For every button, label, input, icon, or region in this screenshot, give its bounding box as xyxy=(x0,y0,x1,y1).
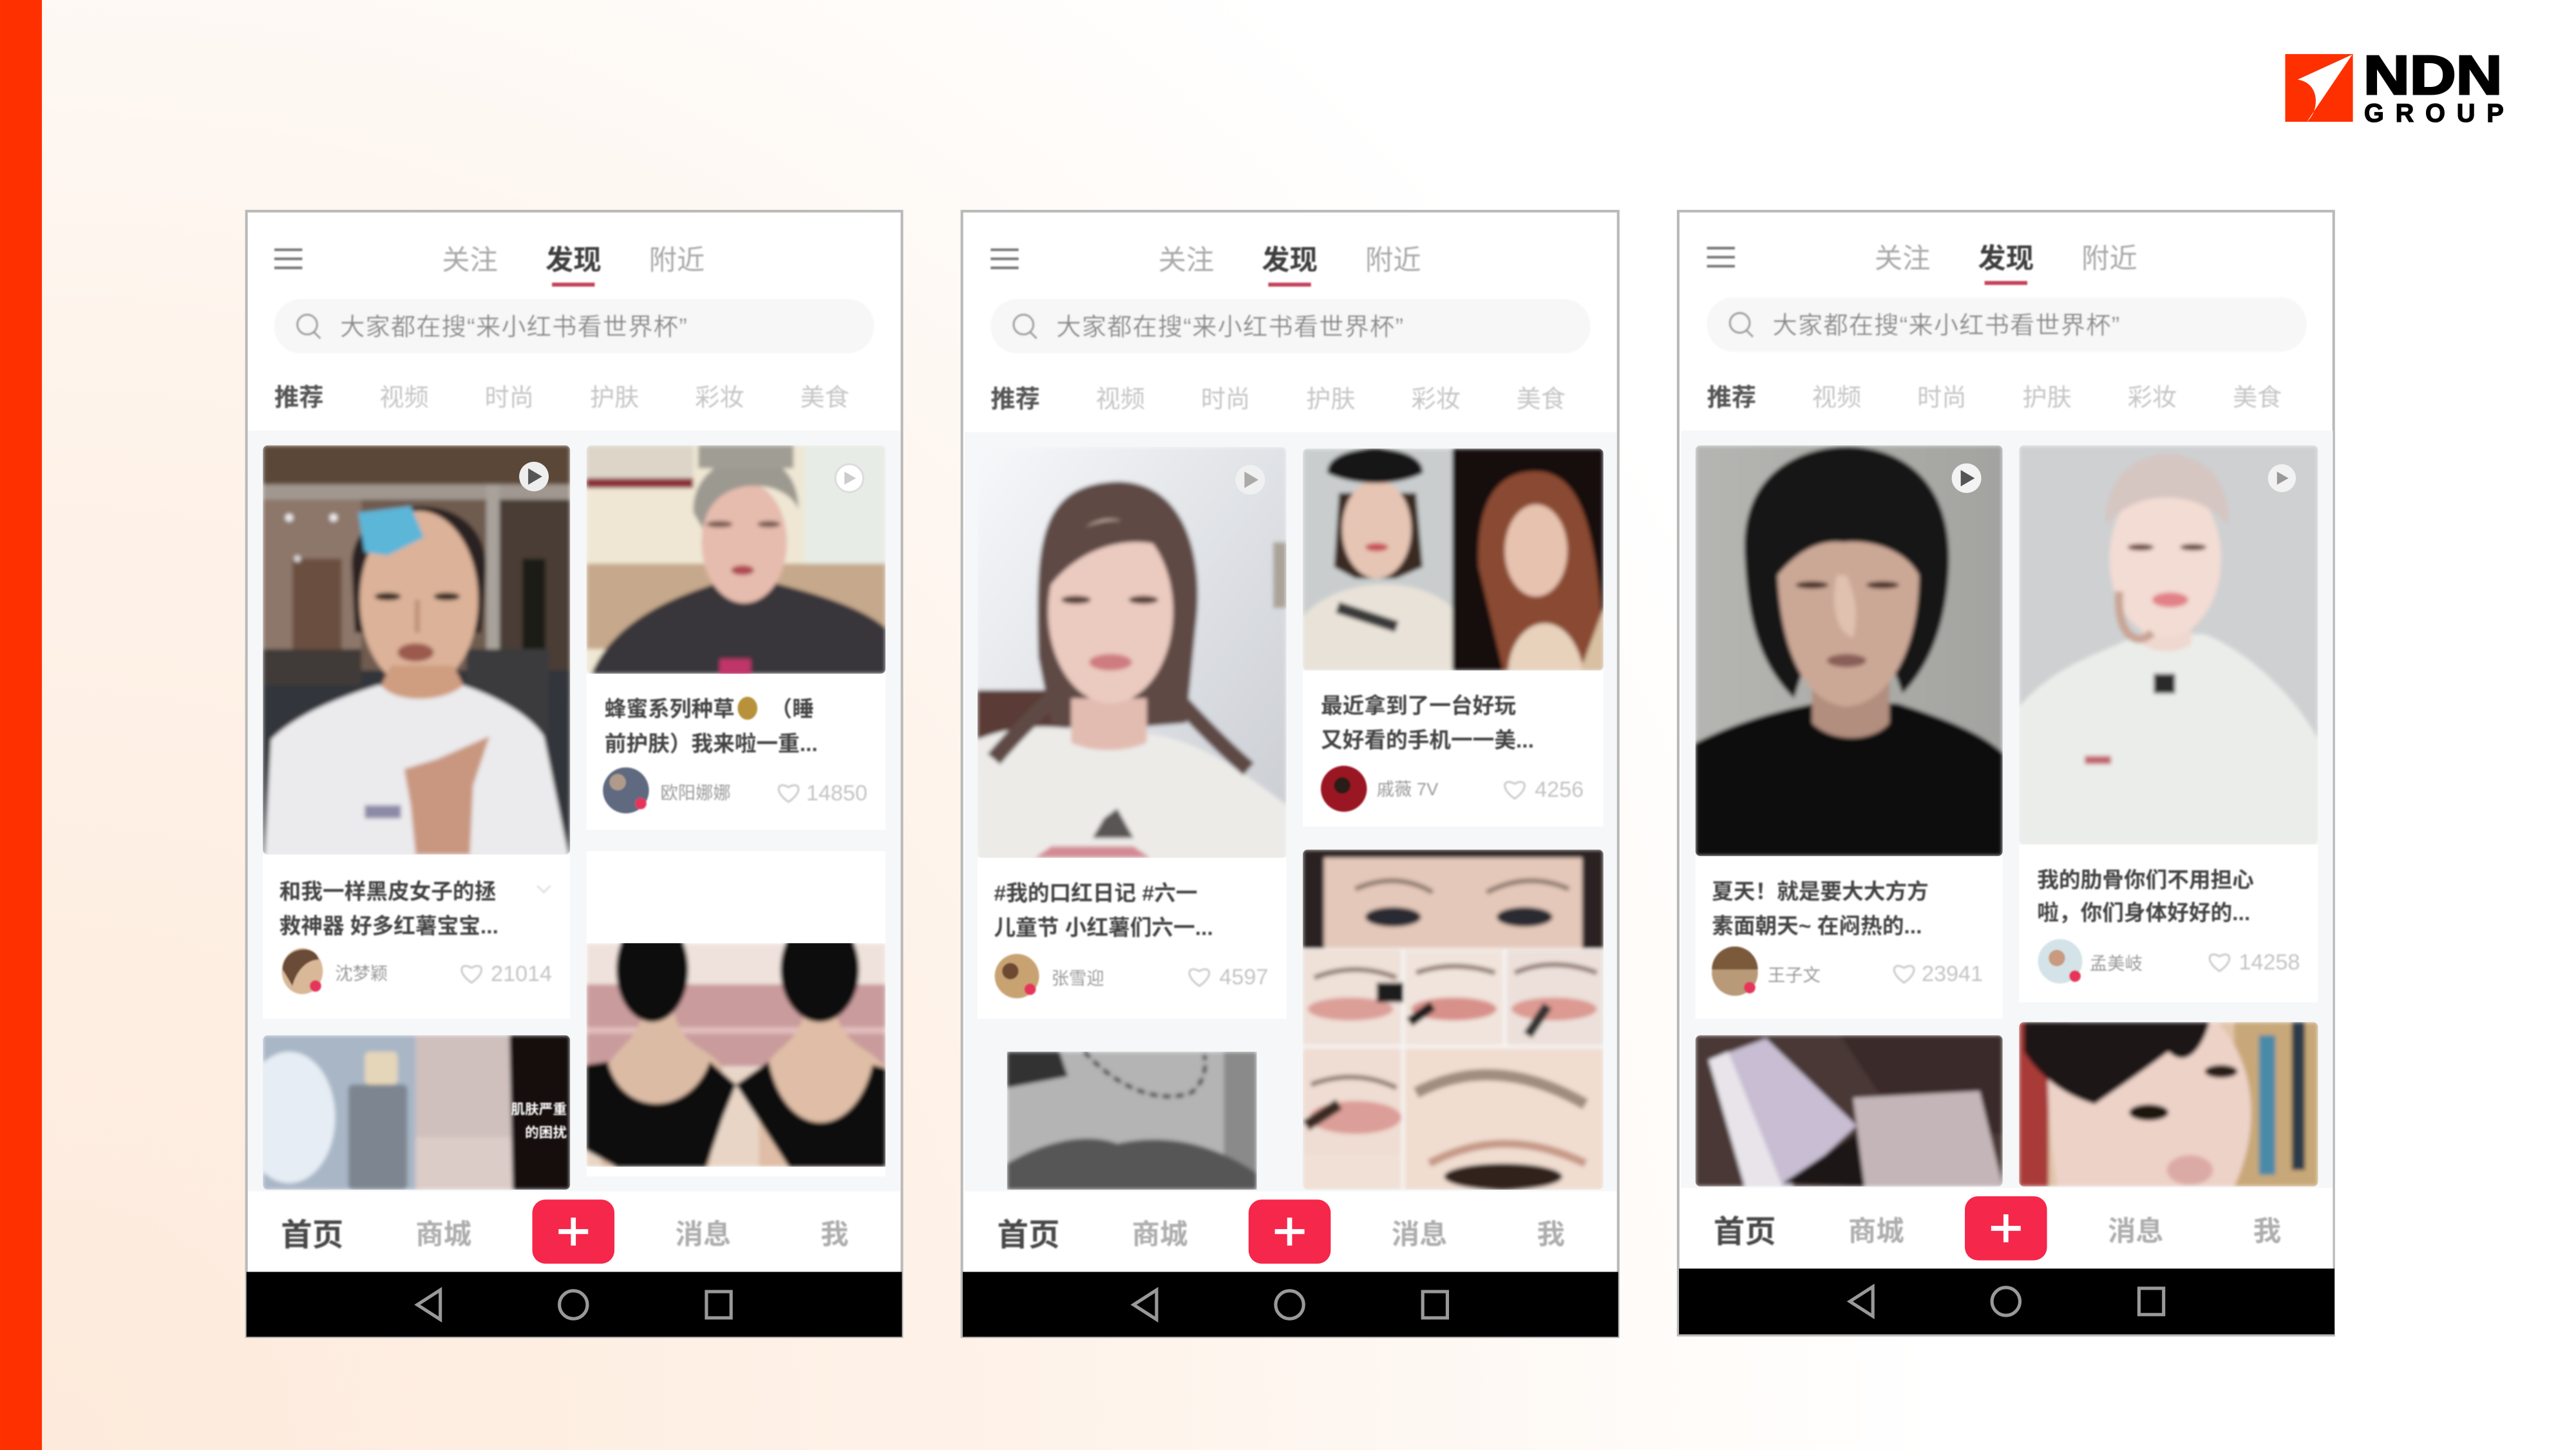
icon: menu xyxy=(990,250,1019,268)
top tabs: 附近 xyxy=(2081,243,2137,274)
photo: close-up woman xyxy=(2019,1022,2318,1187)
card text: 孟美岐 xyxy=(2090,953,2143,973)
card text xyxy=(603,697,867,814)
category tabs: 美食 xyxy=(2233,384,2282,412)
category tabs: 时尚 xyxy=(485,384,534,412)
add button xyxy=(1965,1196,2047,1261)
category tabs xyxy=(274,384,849,412)
top tabs: 关注 xyxy=(1158,245,1214,276)
card text: 我的肋骨你们不用担心 xyxy=(2037,868,2254,893)
category tabs: 时尚 xyxy=(1917,384,1967,412)
category tabs: 护肤 xyxy=(2022,384,2072,412)
feed background xyxy=(248,430,900,1191)
avatar xyxy=(2038,939,2082,984)
card text: 救神器 好多红薯宝宝... xyxy=(279,914,498,939)
category tabs xyxy=(990,386,1566,414)
active tab underline xyxy=(1985,281,2027,285)
logo icon: paper plane xyxy=(2285,54,2353,122)
card text: #我的口红日记 #六一 xyxy=(994,881,1197,906)
android bar xyxy=(963,1272,1618,1337)
category tabs xyxy=(1707,384,2282,412)
search bar: 大家都在搜“来小红书看世界杯” xyxy=(1056,313,1404,341)
card text: 欧阳娜娜 xyxy=(661,783,731,803)
photo: woman in white xyxy=(2019,445,2318,844)
top tabs: 关注 xyxy=(442,245,498,276)
feed background xyxy=(964,432,1616,1191)
icon: menu xyxy=(1707,248,1735,266)
card text: 戚薇 7V xyxy=(1377,779,1439,799)
search bar xyxy=(990,299,1590,353)
icon: play xyxy=(1235,465,1265,495)
photo: two women from behind xyxy=(586,943,886,1167)
card text: 14850 xyxy=(806,781,867,805)
card text: 沈梦颖 xyxy=(335,963,388,983)
android bar xyxy=(1679,1268,2334,1334)
card: right 1 xyxy=(587,445,886,830)
card text: 张雪迎 xyxy=(1052,968,1104,988)
card text: 前护肤）我来啦一重... xyxy=(605,732,818,756)
category tabs: 护肤 xyxy=(1306,386,1356,414)
photo overlay caption xyxy=(511,1102,567,1140)
card text: 4256 xyxy=(1535,777,1584,802)
category tabs: 彩妆 xyxy=(695,384,744,412)
top tabs: 附近 xyxy=(649,245,705,276)
bottom navigation: 商城 xyxy=(1848,1216,1904,1247)
photo overlay caption: 的困扰 xyxy=(525,1124,567,1140)
category tabs: 视频 xyxy=(379,384,429,412)
icon: play xyxy=(519,462,549,491)
category tabs: 推荐 xyxy=(1707,384,1756,412)
card text xyxy=(279,879,552,994)
photo: woman in grey cap xyxy=(587,445,886,675)
card text: 和我一样黑皮女子的拯 xyxy=(279,879,496,904)
icon: menu xyxy=(274,250,302,268)
avatar xyxy=(282,948,323,994)
card: right 1 xyxy=(2019,445,2318,1002)
top navigation and search xyxy=(1707,243,2307,412)
photo: open books xyxy=(1696,1035,2003,1187)
card text: 王子文 xyxy=(1768,965,1821,985)
photo overlay caption: 肌肤严重 xyxy=(511,1102,567,1118)
top tabs xyxy=(1158,245,1421,276)
card text: 夏天！就是要大大方方 xyxy=(1712,879,1929,904)
avatar xyxy=(1321,766,1367,812)
card text: 素面朝天~ 在闷热的... xyxy=(1712,914,1922,939)
card text: 又好看的手机一一美... xyxy=(1321,729,1534,753)
photo: woman in white tee xyxy=(978,447,1286,871)
top tabs xyxy=(1875,243,2137,274)
photo: two women collage xyxy=(1303,448,1604,671)
panel: phone screen 2 xyxy=(962,211,1618,1337)
active tab underline xyxy=(1268,283,1311,287)
card text xyxy=(1321,693,1584,812)
top navigation and search xyxy=(274,245,874,412)
logo wordmark GROUP: GROUP xyxy=(2364,99,2504,128)
search bar: 大家都在搜“来小红书看世界杯” xyxy=(340,313,688,341)
card text: 蜂蜜系列种草 xyxy=(605,697,735,721)
logo: NDN Group xyxy=(2285,45,2504,128)
bottom navigation: 我 xyxy=(1537,1219,1565,1250)
top tabs: 附近 xyxy=(1365,245,1421,276)
top tabs: 发现 xyxy=(545,245,601,276)
photo: woman with blue headband xyxy=(263,445,570,863)
photo: eye makeup collage xyxy=(1303,850,1604,1190)
search bar xyxy=(1707,298,2307,352)
card text: 儿童节 小红薯们六一... xyxy=(994,916,1213,940)
photo: woman with short black hair xyxy=(1696,445,2003,856)
bottom navigation xyxy=(964,1191,1616,1270)
category tabs: 护肤 xyxy=(590,384,639,412)
bottom navigation xyxy=(248,1191,900,1270)
category tabs: 美食 xyxy=(800,384,849,412)
photo: neck outline xyxy=(1007,1052,1257,1190)
category tabs: 推荐 xyxy=(990,386,1040,414)
card text: （睡 xyxy=(770,697,814,721)
top navigation and search xyxy=(990,245,1590,414)
card text: 21014 xyxy=(491,962,552,986)
category tabs: 视频 xyxy=(1812,384,1861,412)
panel: phone screen 3 xyxy=(1678,211,2334,1335)
card text: 14258 xyxy=(2239,950,2300,975)
card text: 23941 xyxy=(1922,962,1983,986)
card text xyxy=(994,881,1268,998)
bottom navigation: 首页 xyxy=(997,1218,1059,1253)
bottom navigation: 首页 xyxy=(281,1218,343,1253)
bottom navigation xyxy=(1681,1188,2333,1268)
card text: 最近拿到了一台好玩 xyxy=(1321,693,1516,718)
bottom navigation: 消息 xyxy=(675,1219,731,1250)
avatar xyxy=(603,767,649,814)
logo wordmark NDN: NDN xyxy=(2363,45,2502,106)
top tabs: 发现 xyxy=(1978,243,2034,274)
category tabs: 彩妆 xyxy=(2128,384,2177,412)
card text xyxy=(1712,879,1983,996)
card text: 啦，你们身体好好的... xyxy=(2037,901,2250,926)
search bar xyxy=(274,299,874,353)
card text xyxy=(2037,868,2300,984)
card text: 4597 xyxy=(1219,965,1268,989)
bottom navigation: 消息 xyxy=(2108,1216,2164,1247)
top tabs: 发现 xyxy=(1262,245,1318,276)
card: right 2 white area xyxy=(587,851,886,1177)
photo: skincare products xyxy=(243,1035,570,1190)
feed background xyxy=(1681,430,2333,1188)
category tabs: 彩妆 xyxy=(1411,386,1461,414)
avatar xyxy=(1712,946,1758,996)
red side bar xyxy=(0,0,42,1450)
bottom navigation: 首页 xyxy=(1714,1215,1776,1250)
card: right 1 xyxy=(1303,448,1604,826)
panel: phone screen 1 xyxy=(243,211,902,1337)
bottom navigation: 我 xyxy=(2253,1216,2281,1247)
bottom navigation: 消息 xyxy=(1392,1219,1447,1250)
active tab underline xyxy=(552,283,594,287)
bottom navigation: 商城 xyxy=(415,1219,471,1250)
add button xyxy=(1249,1199,1331,1264)
card: left 1 xyxy=(978,447,1286,1019)
search bar: 大家都在搜“来小红书看世界杯” xyxy=(1773,312,2120,339)
top tabs xyxy=(442,245,705,276)
icon: play xyxy=(2268,464,2296,492)
icon: play xyxy=(1952,463,1982,493)
bottom navigation: 商城 xyxy=(1132,1219,1188,1250)
category tabs: 视频 xyxy=(1096,386,1145,414)
category tabs: 时尚 xyxy=(1201,386,1250,414)
icon: play faint xyxy=(835,464,864,492)
card: left 1 xyxy=(263,445,570,1019)
avatar xyxy=(995,954,1039,998)
card: left 1 xyxy=(1696,445,2003,1019)
category tabs: 美食 xyxy=(1517,386,1566,414)
bottom navigation: 我 xyxy=(820,1219,849,1250)
android bar xyxy=(247,1272,902,1337)
top tabs: 关注 xyxy=(1875,243,1930,274)
add button xyxy=(533,1199,614,1264)
category tabs: 推荐 xyxy=(274,384,324,412)
